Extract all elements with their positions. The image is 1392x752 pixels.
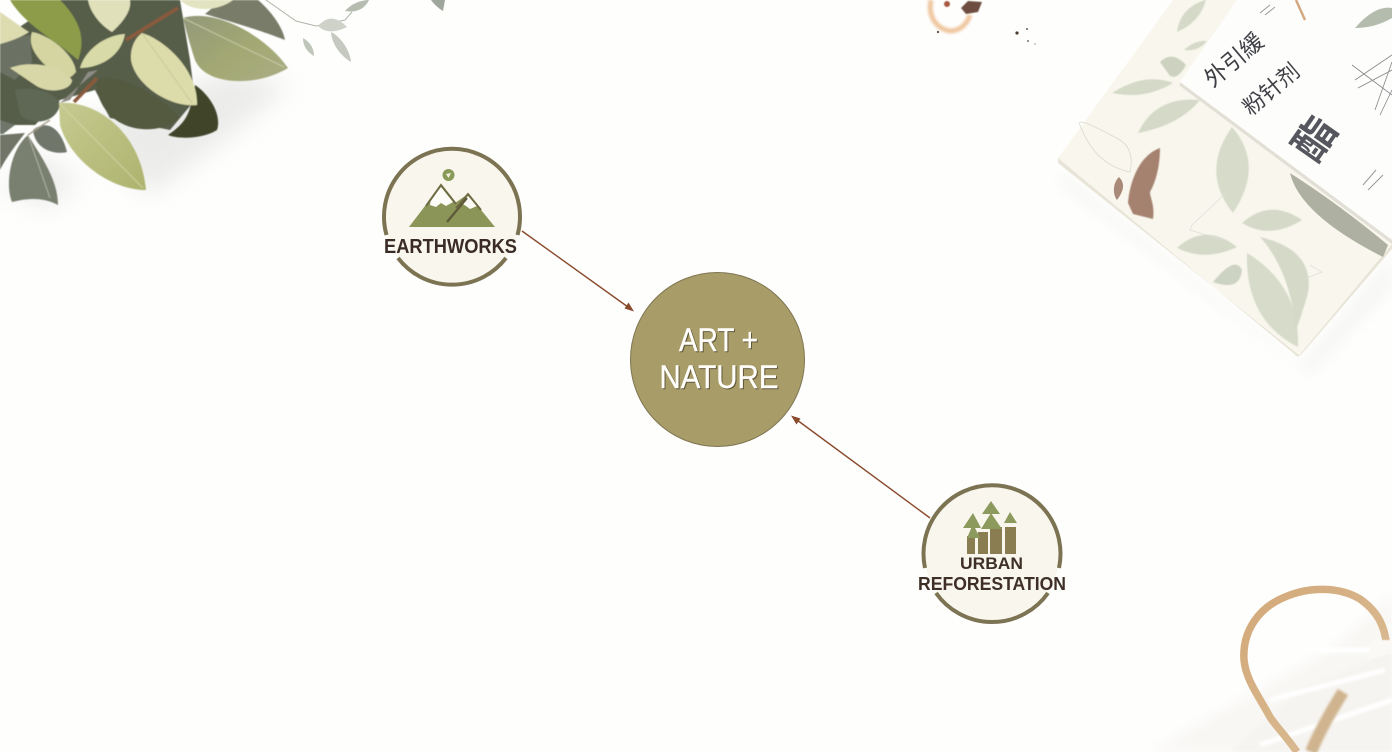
book title text: 外引緩 [1199, 28, 1269, 92]
icon: sun [442, 169, 454, 181]
central label [660, 322, 780, 396]
arrow: Earthworks to Art + Nature [522, 231, 634, 312]
central label: ART + [680, 323, 759, 359]
book large character: 酯 [1284, 108, 1346, 169]
brown leaves [1128, 148, 1160, 219]
central label: NATURE [660, 360, 780, 396]
badge ring [923, 485, 1060, 622]
photo: twine and white fibre, bottom right [1150, 589, 1392, 752]
book subtitle text: 粉针剂 [1238, 58, 1304, 120]
photo: coffee stain ring and crumbs, top [930, 0, 1036, 45]
icon: mountains [409, 185, 495, 227]
arrow: Urban Reforestation to Art + Nature [791, 416, 930, 518]
white page [1180, 0, 1392, 240]
central label: NATURE [660, 359, 778, 395]
photo: botanical book, top right [1058, 0, 1392, 375]
cover leaves [1112, 0, 1309, 347]
book cover [1058, 0, 1392, 357]
central node: Art + Nature [630, 272, 804, 446]
icon: trees [963, 501, 1017, 538]
badge ring [384, 149, 520, 285]
badge label: REFORESTATION: REFORESTATION [918, 574, 1066, 594]
central label: ART + [679, 322, 758, 358]
badge: Urban Reforestation [918, 484, 1066, 622]
photo: leafy branch, top left [0, 0, 445, 210]
badge: Earthworks [384, 148, 520, 285]
badge label: URBAN: URBAN [960, 554, 1023, 573]
icon: buildings [967, 527, 1016, 554]
badge label: EARTHWORKS [384, 235, 517, 258]
page sketches [1352, 55, 1392, 115]
